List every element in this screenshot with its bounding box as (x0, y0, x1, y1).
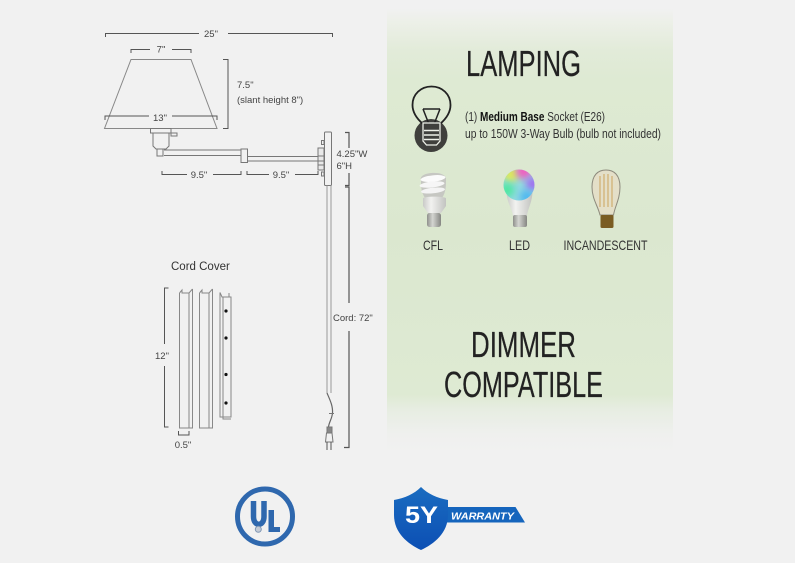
icon: 5 year warranty badge (394, 487, 525, 550)
dimension: arm lengths: 9.5" (191, 170, 207, 181)
elbow joint (241, 149, 248, 162)
icon: medium base bulb (412, 86, 450, 152)
dimension: wall plate size: 6"H (336, 161, 352, 172)
dimension: overall width 25 inches: 25" (204, 29, 218, 40)
icon: UL certification mark (238, 489, 292, 544)
second arm (248, 156, 318, 161)
text: socket specification (465, 110, 661, 141)
cord (327, 186, 331, 393)
heading: dimmer compatible: DIMMER (471, 324, 576, 365)
heading: dimmer compatible: COMPATIBLE (444, 364, 603, 405)
dimension: shade bottom 13 inches: 13" (153, 113, 167, 124)
cord cover piece 1 (180, 289, 192, 428)
text: socket specification: up to 150W 3-Way Bulb (bulb not included) (465, 127, 661, 141)
warranty ribbon (440, 507, 525, 522)
bulb option: CFL (419, 173, 446, 253)
bulb option: incandescent (564, 170, 648, 253)
wall mount bracket (318, 148, 324, 170)
diagram: lamp shade with dimensions (104, 29, 332, 128)
dimension: cord 72 inches (333, 187, 373, 448)
dimension: shade bottom 13 inches (105, 113, 217, 124)
icon: plug (326, 393, 334, 450)
heading: cord cover: Cord Cover (171, 261, 230, 273)
text: socket specification: (1) Medium Base Socket (E26) (465, 110, 605, 124)
dimension: shade height: (slant height 8") (237, 95, 303, 106)
socket (150, 128, 177, 156)
dimension: arm lengths: 9.5" (273, 170, 289, 181)
dimension: shade top 7 inches (131, 44, 191, 56)
dimension: cord cover height 12 inches (155, 288, 169, 427)
diagram: swing arm and wall plate (150, 128, 332, 393)
dimension: arm lengths (162, 170, 318, 181)
wall plate (324, 132, 332, 186)
lamp shade (104, 60, 217, 128)
dimension: wall plate size: 4.25"W (336, 149, 367, 160)
mounting screws (322, 140, 324, 176)
icon: incandescent bulb (592, 170, 620, 228)
dimension: cord cover width 0.5 inches (175, 431, 191, 451)
dimension: cord 72 inches: Cord: 72" (333, 313, 373, 324)
bulb option: CFL: CFL (423, 237, 443, 253)
icon: 5 year warranty badge: 5Y (405, 502, 438, 529)
dimension: shade top 7 inches: 7" (157, 44, 165, 56)
dimension: cord cover width 0.5 inches: 0.5" (175, 440, 191, 451)
dimension: shade height: 7.5" (237, 80, 254, 91)
cord cover piece 3 with holes (220, 292, 231, 419)
dimension: wall plate size (336, 132, 367, 186)
cord cover piece 2 (200, 289, 212, 428)
first arm (164, 150, 241, 156)
diagram: cord cover pieces (155, 288, 231, 451)
bulb option: incandescent: INCANDESCENT (564, 237, 648, 253)
shield (394, 487, 448, 550)
panel: lamping and dimmer background (387, 8, 673, 452)
heading: dimmer compatible (444, 324, 603, 405)
dimension: shade height (223, 60, 303, 128)
bulb option: LED (504, 170, 534, 250)
dimension: overall width 25 inches (106, 29, 332, 40)
bulb option: LED: LED (509, 237, 530, 253)
heading: lamping: LAMPING (466, 43, 581, 84)
icon: CFL bulb (419, 173, 446, 227)
dimension: cord cover height 12 inches: 12" (155, 351, 169, 362)
icon: LED bulb (504, 170, 534, 227)
infographic canvas (104, 20, 673, 550)
icon: 5 year warranty badge: WARRANTY (451, 512, 515, 522)
